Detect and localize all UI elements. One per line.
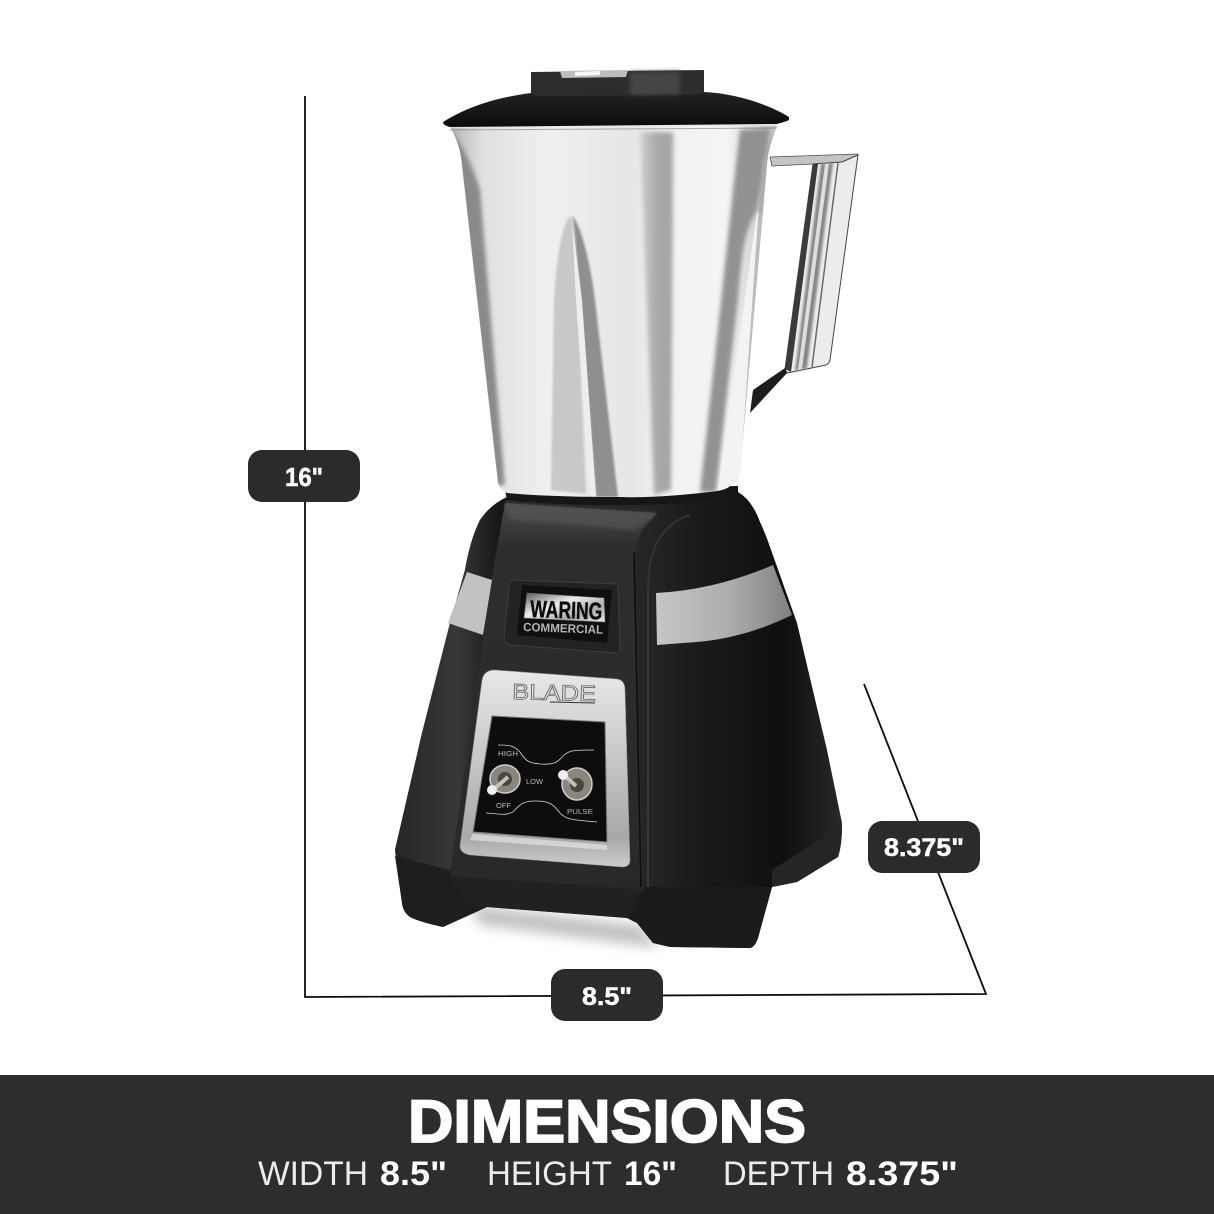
panel curves (498, 745, 594, 764)
height spec: 16" (624, 1155, 677, 1193)
logo plate (517, 585, 612, 643)
width spec (258, 1155, 447, 1193)
left wing (395, 497, 507, 878)
right lower band and foot (627, 887, 772, 948)
lid (443, 70, 789, 127)
right reflection (700, 128, 770, 492)
logo recess (504, 580, 620, 653)
left foot (395, 856, 487, 927)
front lower band (449, 876, 644, 918)
dimension lines (305, 96, 986, 997)
right silver stripe (656, 565, 792, 645)
width spec: 8.5" (380, 1155, 447, 1193)
jar collar (505, 486, 738, 505)
label: width 8.5: 8.5" (582, 983, 632, 1011)
heading: DIMENSIONS (408, 1088, 806, 1155)
width spec: WIDTH (258, 1155, 368, 1193)
height spec: HEIGHT (487, 1155, 612, 1193)
toggle: left (487, 765, 520, 795)
depth spec (723, 1155, 958, 1193)
base body (395, 492, 842, 948)
label: height 16: 16" (285, 462, 323, 492)
floor shadow (470, 905, 660, 948)
toggle: right (558, 768, 592, 800)
panel labels: HIGH (498, 749, 518, 758)
product image: blender (395, 70, 858, 948)
handle strut (750, 368, 787, 413)
steel body (450, 125, 777, 497)
label: height 16 (248, 450, 360, 502)
centre reflection (640, 132, 674, 495)
base (395, 492, 842, 948)
control plate: PULSE (567, 807, 593, 816)
seam highlight (647, 590, 649, 887)
label: width 8.5 (551, 969, 663, 1021)
control plate: LOW (526, 777, 544, 786)
control plate (460, 670, 630, 867)
label: depth 8.375: 8.375" (884, 834, 964, 862)
left reflection (452, 130, 505, 485)
logo plate: WARING (530, 596, 603, 626)
left silver stripe (448, 572, 492, 635)
depth spec: DEPTH (723, 1155, 834, 1193)
depth spec: 8.375" (846, 1155, 958, 1193)
cap insert (560, 70, 628, 78)
label: depth 8.375 (868, 821, 980, 873)
rib (551, 216, 586, 494)
logo plate: COMMERCIAL (523, 620, 603, 637)
jar (443, 70, 789, 505)
control plate: OFF (496, 801, 511, 810)
height spec (487, 1155, 677, 1193)
BLADE wordmark: BLADE (512, 679, 596, 706)
footer band (0, 1075, 1214, 1214)
front panel (450, 503, 657, 887)
handle (750, 154, 858, 413)
lid cap (531, 70, 704, 96)
